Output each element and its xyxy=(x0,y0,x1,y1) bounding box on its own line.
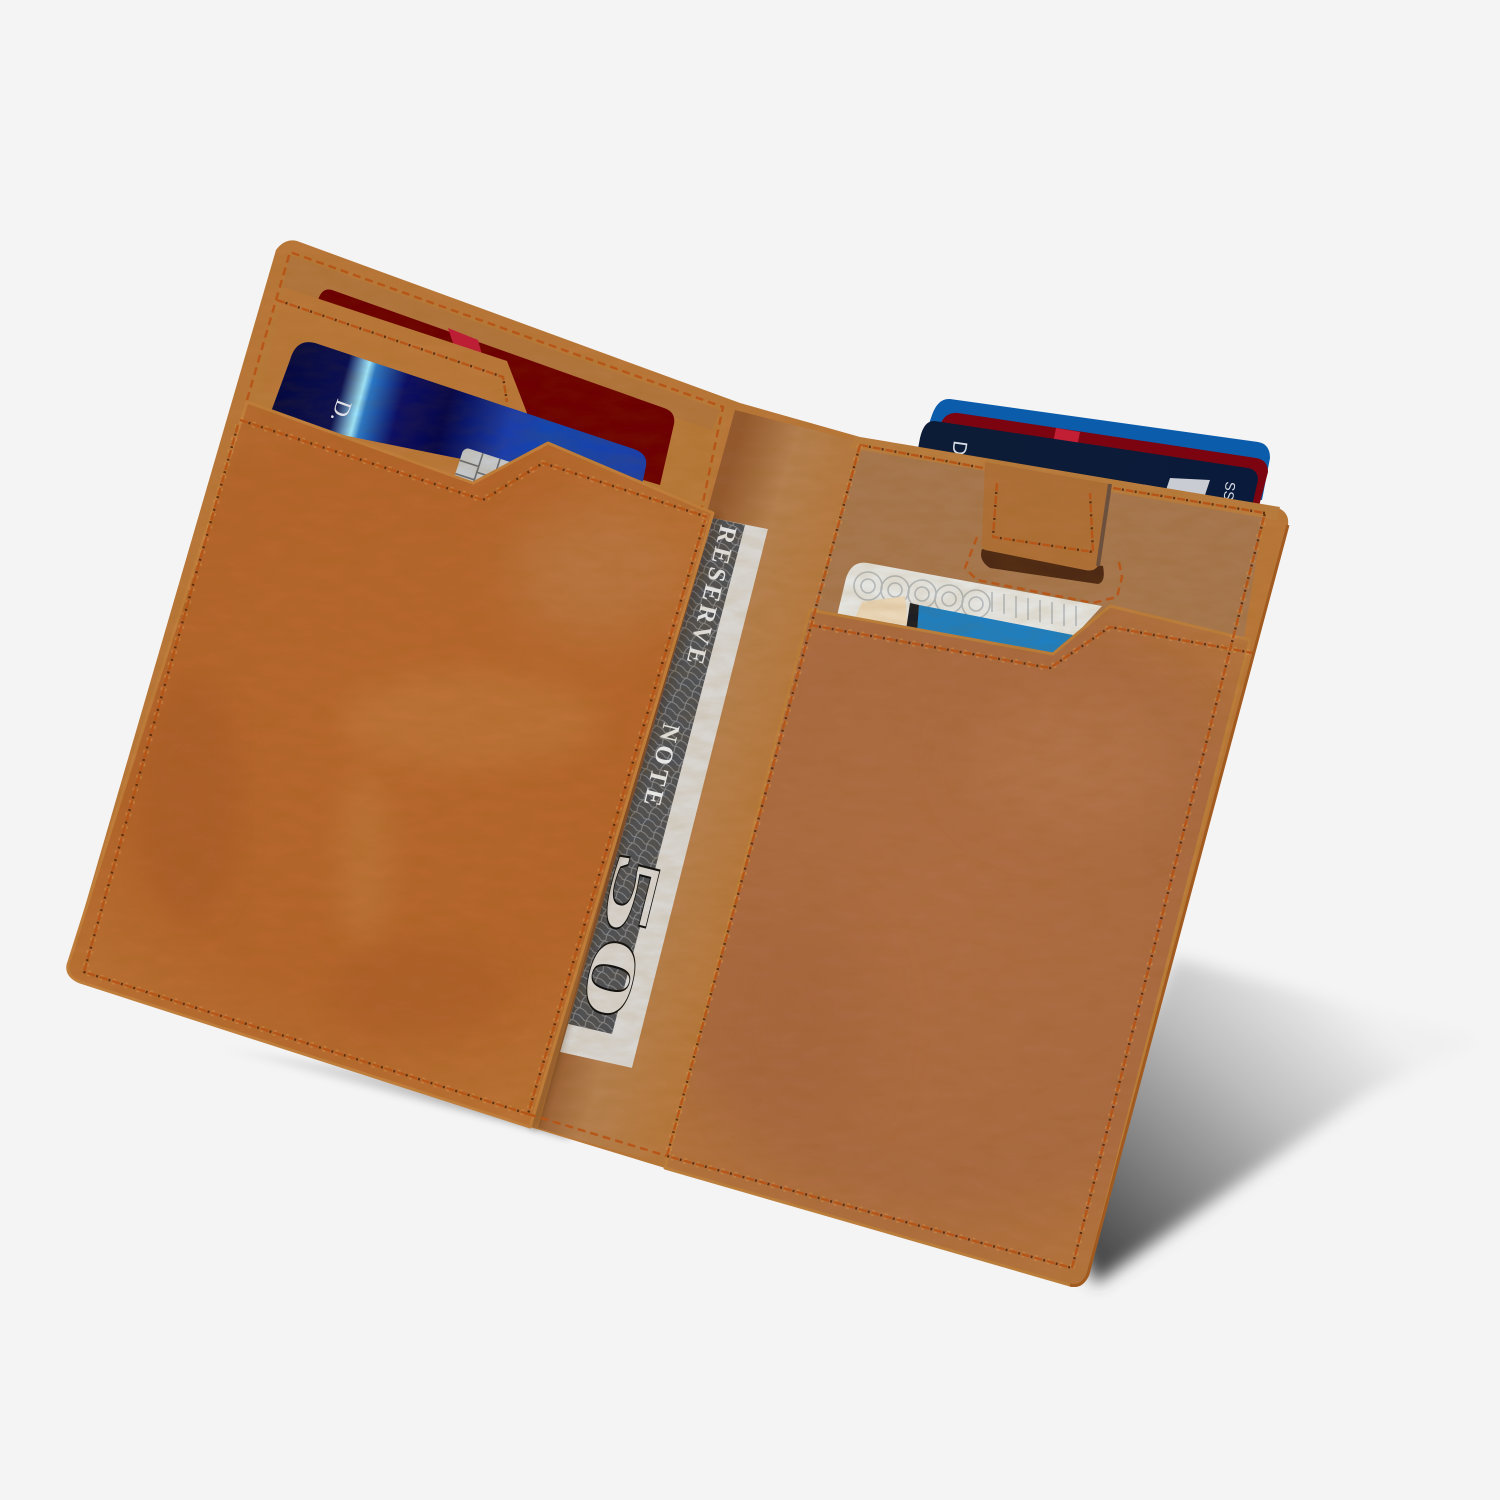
left panel side and bottom stitch xyxy=(84,425,705,1114)
panel side stitch xyxy=(667,445,1265,1268)
tab edge xyxy=(1098,484,1110,566)
ID card photo patch xyxy=(855,596,908,625)
left panel outer stitch xyxy=(247,252,723,507)
red card stripe xyxy=(448,328,484,362)
upper pocket stitch xyxy=(277,300,507,402)
word NOTE: NOTE xyxy=(638,721,684,809)
note dark engraved band xyxy=(560,518,745,1034)
right outer edge xyxy=(1070,525,1288,1286)
red card xyxy=(310,289,674,485)
band engraving xyxy=(560,518,745,1034)
cards behind right panel xyxy=(915,399,1270,515)
top wash xyxy=(282,255,720,430)
panel: left front pocket xyxy=(68,402,713,1127)
pocket edge shadow on spine and note xyxy=(534,516,716,1128)
pocket leather xyxy=(68,402,713,1127)
ID card dark strip xyxy=(906,603,919,632)
panel: right front pocket xyxy=(665,445,1288,1286)
panel: left upper interior xyxy=(246,252,728,515)
card chip xyxy=(451,447,519,505)
recessed leather xyxy=(812,447,1263,645)
tab stitch xyxy=(993,483,1093,552)
tone patches xyxy=(140,500,690,1040)
pocket leather xyxy=(665,606,1250,1286)
drop shadow: right xyxy=(1060,958,1480,1284)
card letter D.: D. xyxy=(326,396,357,426)
mid crease highlight xyxy=(356,680,585,760)
vertical crease highlight xyxy=(348,794,382,926)
front pocket top stitch xyxy=(240,420,707,517)
card letters SS: SS xyxy=(1220,481,1239,501)
slot stitch xyxy=(965,537,1122,603)
denomination 50: 50 xyxy=(565,844,678,1029)
wallet base silhouette xyxy=(68,240,1288,1286)
word RESERVE: RESERVE xyxy=(681,523,741,667)
red card accent xyxy=(1052,428,1080,452)
tone patches xyxy=(1077,820,1211,1287)
note paper xyxy=(560,518,768,1068)
panel: right back panel xyxy=(812,437,1280,656)
spine bottom stitch xyxy=(528,1114,667,1156)
blue card xyxy=(268,342,646,495)
left upper leather xyxy=(246,252,728,515)
ID card circle pattern xyxy=(854,572,1076,626)
top stitches xyxy=(860,445,1265,513)
pull slot xyxy=(981,549,1104,584)
drop shadow: left xyxy=(210,1046,570,1138)
silver card mark xyxy=(1166,478,1210,495)
pocket stitch xyxy=(810,625,1253,668)
bank note xyxy=(560,518,768,1068)
top rim xyxy=(850,437,1280,520)
dark patch left xyxy=(140,680,240,920)
ID card blue block xyxy=(917,605,1073,656)
red back card xyxy=(925,413,1268,510)
upper pocket flap xyxy=(262,287,527,440)
ID card xyxy=(836,563,1102,656)
left darker patch xyxy=(730,910,870,1130)
blue back card xyxy=(920,399,1270,500)
panel: spine interior xyxy=(538,410,860,1165)
faded highlight at top right xyxy=(510,500,690,640)
pull tab xyxy=(981,462,1110,570)
card letter D: D xyxy=(947,439,971,457)
navy back card xyxy=(915,421,1258,515)
upper light patch xyxy=(970,690,1190,830)
dark patch bottom xyxy=(330,940,510,1040)
leather grain overlay xyxy=(60,230,1300,1300)
